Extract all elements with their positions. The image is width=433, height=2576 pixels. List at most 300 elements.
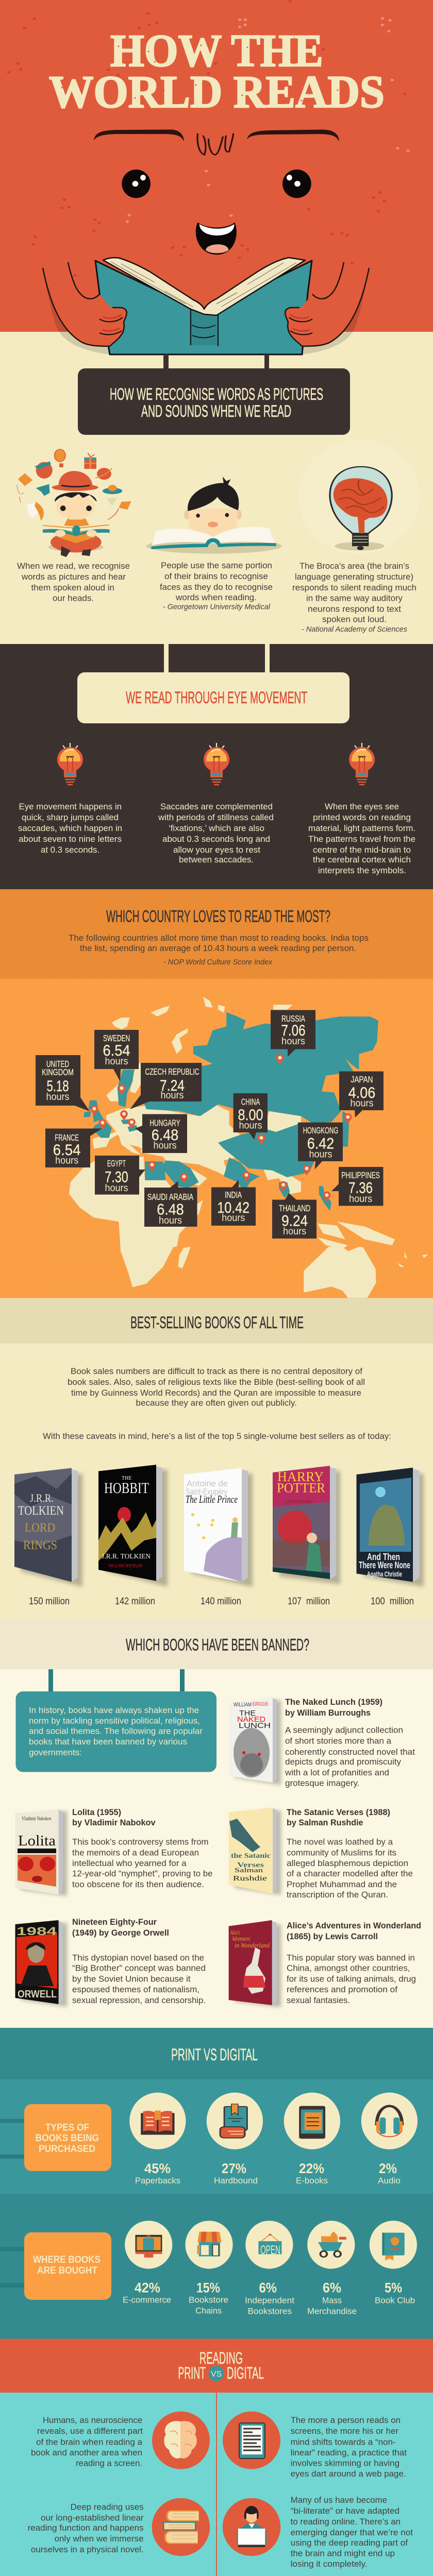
text: non-linear reading: mind shifts towards a “non- xyxy=(291,2438,396,2447)
text: the satanic verses xyxy=(287,1808,413,1900)
panel: country header background xyxy=(0,889,433,979)
text: alice's adventures in wonderland: for its use of talking animals, drug xyxy=(287,1975,416,1984)
book: the little prince xyxy=(184,1468,253,1587)
stats: types of books: 27% xyxy=(222,2161,246,2176)
stats: types of books: 2% xyxy=(379,2161,397,2176)
map: land xyxy=(69,997,428,1298)
text: broca's area xyxy=(292,562,417,634)
stats: types of books: 45% xyxy=(144,2161,171,2176)
text: alice's adventures in wonderland: (1865) by Lewis Carroll xyxy=(287,1932,378,1941)
text: deep reading: ourselves in a physical novel. xyxy=(31,2545,144,2554)
text: non-linear reading: linear” reading, a practice that xyxy=(291,2448,407,2458)
text: country intro: - NOP World Culture Score Index xyxy=(163,958,272,967)
icon: light bulb xyxy=(57,743,83,785)
text: the naked lunch: grotesque imagery. xyxy=(285,1779,360,1788)
callout: czech republic: hours xyxy=(161,1090,184,1101)
text: nineteen eighty-four: sexual repression, and censorship. xyxy=(72,1996,206,2005)
text: faces and words: People use the same portion xyxy=(161,561,272,570)
text: the satanic verses: The novel was loathed by a xyxy=(287,1838,393,1847)
book: the satanic verses: the Satanic xyxy=(231,1852,271,1860)
text: faces and words: faces as they do to recognise xyxy=(160,583,273,592)
heading: how we recognise words: AND SOUNDS WHEN WE READ xyxy=(141,402,291,420)
text: non-linear reading: The more a person reads on xyxy=(291,2416,401,2425)
stats: where bought: 15% xyxy=(196,2280,220,2296)
stats: types of books: Paperbacks xyxy=(135,2176,180,2185)
text: fixations xyxy=(158,802,274,865)
book: the little prince: Antoine de xyxy=(187,1479,228,1488)
heading: reading print vs digital: VS xyxy=(211,2370,222,2379)
text: bi-literate: “bi-literate” or have adapted xyxy=(291,2506,399,2516)
book: harry potter xyxy=(273,1466,340,1584)
icon row: where bought xyxy=(125,2221,417,2269)
book held by character xyxy=(95,258,312,354)
text: alice's adventures in wonderland: China, amongst other countries, xyxy=(287,1964,410,1973)
callout: banned books intro: and social themes. The following are popular xyxy=(29,1727,203,1736)
callout: hungary: 6.48 xyxy=(152,1127,178,1144)
text: light patterns: centre of the mid-brain to xyxy=(313,845,411,855)
callout: hungary: hours xyxy=(154,1141,176,1151)
book: lord of the rings: J.R.R. xyxy=(30,1492,54,1504)
illustration: brain in light bulb xyxy=(298,439,420,554)
book: the naked lunch: NAKED xyxy=(237,1715,265,1724)
text: light patterns: printed words on reading xyxy=(313,813,411,822)
callout: thailand xyxy=(272,1181,317,1239)
callout: czech republic: CZECH REPUBLIC xyxy=(145,1066,199,1077)
text: lolita xyxy=(72,1808,212,1889)
icon: hardbound xyxy=(207,2093,263,2149)
callout: hungary: HUNGARY xyxy=(149,1118,180,1128)
text: top 5 intro: With these caveats in mind, here’s a list of the top 5 single-volume best sellers as of today: xyxy=(43,1432,391,1441)
icon row: types of books xyxy=(129,2093,418,2149)
text: country intro: the list, spending an average of 10.43 hours a week reading per person. xyxy=(80,944,356,953)
callout: china: hours xyxy=(239,1120,262,1131)
callout: united kingdom xyxy=(36,1055,98,1116)
text: lolita: Lolita (1955) xyxy=(72,1808,121,1817)
callout: united kingdom: 5.18 xyxy=(46,1078,69,1095)
book: the hobbit: THE xyxy=(122,1476,131,1481)
panel: reading print vs digital header background xyxy=(0,2339,433,2393)
heading: reading print vs digital: READING xyxy=(199,2349,243,2367)
heading: we read through eye movement: WE READ THROUGH EYE MOVEMENT xyxy=(126,688,307,707)
icon: book stack xyxy=(152,2498,210,2556)
illustration: boy reading with imagined objects xyxy=(17,449,131,557)
label: types of books: TYPES OF xyxy=(45,2123,89,2133)
book: the naked lunch: BURROUGHS xyxy=(253,1701,268,1707)
text: nineteen eighty-four: espoused themes of nationalism, xyxy=(72,1985,199,1994)
text: non-linear reading xyxy=(291,2416,407,2479)
text: non-linear reading: screens, the more his or her xyxy=(291,2427,399,2436)
callout: czech republic xyxy=(120,1063,202,1121)
text: fixations: ‘fixations,’ which are also xyxy=(169,824,264,833)
callout: china: 8.00 xyxy=(238,1107,263,1124)
hero freckles xyxy=(9,1,408,309)
sign chains xyxy=(164,644,270,673)
text: different brain parts: reveals, use a different part xyxy=(37,2427,143,2436)
book: harry potter: POTTER xyxy=(277,1481,326,1495)
callout: united kingdom: hours xyxy=(46,1092,69,1103)
callout: saudi arabia: SAUDI ARABIA xyxy=(147,1192,193,1202)
stats: types of books xyxy=(135,2161,401,2185)
text: deep reading: our long-established linear xyxy=(41,2514,144,2523)
book pages xyxy=(103,258,305,315)
callout: egypt xyxy=(95,1156,156,1195)
callout: japan: 4.06 xyxy=(348,1084,375,1101)
callout: saudi arabia: 6.48 xyxy=(157,1201,184,1218)
book: alice's adventures in wonderland xyxy=(229,1920,281,2007)
callout: sweden: SWEDEN xyxy=(103,1033,130,1043)
callout: united kingdom: UNITED xyxy=(46,1059,69,1069)
text: the satanic verses: Prophet Muhammad and the xyxy=(287,1880,397,1889)
book: harry potter: J.K.ROWLING xyxy=(285,1499,313,1504)
title xyxy=(49,26,385,117)
text: sales figures: 150 million xyxy=(29,1596,70,1607)
text: light patterns: material, light patterns form. xyxy=(308,824,415,833)
text: lolita: by Vladimir Nabokov xyxy=(72,1818,156,1827)
callout: india: hours xyxy=(222,1213,245,1224)
divider line xyxy=(216,2393,217,2576)
panel: hero background xyxy=(0,0,433,332)
icon: paperback xyxy=(129,2093,186,2149)
callout: philippines: PHILIPPINES xyxy=(341,1170,380,1180)
callout: japan: hours xyxy=(351,1098,373,1109)
text: non-linear reading: eyes dart around a web page. xyxy=(291,2469,406,2479)
title: HOW THE xyxy=(110,26,323,76)
callout: hong kong: hours xyxy=(309,1149,332,1160)
text: saccades xyxy=(18,802,122,855)
book: lord of the rings: TOLKIEN xyxy=(18,1504,64,1518)
text: words as pictures: When we read, we recognise xyxy=(17,562,130,571)
book: lolita: Vladimir Nabokov xyxy=(22,1816,52,1822)
text: broca's area: responds to silent reading much xyxy=(292,583,417,592)
text: lolita: This book’s controversy stems from xyxy=(72,1838,208,1847)
text: different brain parts: book and another area when xyxy=(31,2448,142,2458)
text: lolita: too obscene for its then audience. xyxy=(72,1880,204,1889)
text: bi-literate: Many of us have become xyxy=(291,2496,387,2505)
text: sales figures: 142 million xyxy=(115,1596,155,1607)
book: the little prince: Saint-Exupéry xyxy=(186,1487,227,1497)
stats: where bought: Merchandise xyxy=(307,2307,357,2316)
book: and then there were none: Agatha Christie xyxy=(367,1570,402,1578)
panel: map background xyxy=(0,979,433,1298)
callout: saudi arabia xyxy=(144,1173,197,1227)
heading: how we recognise words xyxy=(78,368,350,435)
text: book sales caveat: because they are often given out publicly. xyxy=(136,1398,297,1408)
panel: best-selling background xyxy=(0,1344,433,1620)
text: nineteen eighty-four: by the Soviet Union because it xyxy=(72,1975,191,1984)
callout: hong kong: HONGKONG xyxy=(303,1125,338,1136)
callout: thailand: hours xyxy=(283,1226,306,1237)
text: broca's area: neurons respond to text xyxy=(308,605,401,614)
heading: reading print vs digital: DIGITAL xyxy=(227,2364,264,2382)
text: nineteen eighty-four xyxy=(72,1918,206,2005)
text: light patterns: the cerebral cortex which xyxy=(313,855,411,865)
callout: france: hours xyxy=(55,1156,78,1166)
icon: book club xyxy=(370,2221,417,2269)
icon: light bulb xyxy=(204,743,229,785)
text: alice's adventures in wonderland: sexual fantasies. xyxy=(287,1996,350,2005)
book: and then there were none: And Then xyxy=(367,1552,400,1562)
stats: types of books: E-books xyxy=(296,2176,328,2185)
text: saccades: about seven to nine letters xyxy=(19,835,122,844)
book: nineteen eighty-four: ORWELL xyxy=(18,1989,57,2000)
stats: where bought: 42% xyxy=(135,2280,160,2296)
text: nineteen eighty-four: “Big Brother” concept was banned xyxy=(72,1964,206,1973)
book: alice's adventures in wonderland: Alice’s xyxy=(230,1928,240,1936)
stats: where bought: Bookstore xyxy=(189,2295,228,2305)
stats: where bought: 6% xyxy=(259,2280,277,2296)
book: the hobbit xyxy=(98,1465,168,1587)
callout: saudi arabia: hours xyxy=(159,1215,182,1226)
callout: india: 10.42 xyxy=(217,1199,249,1216)
book: lord of the rings: RINGS xyxy=(23,1538,57,1552)
connector bars xyxy=(0,2119,24,2287)
text: light patterns: The patterns travel from the xyxy=(308,835,415,844)
text: the naked lunch: coherently constructed novel that xyxy=(285,1748,415,1757)
text: different brain parts xyxy=(31,2416,143,2468)
text: lolita: the memoirs of a dead European xyxy=(72,1849,199,1858)
callout: banned books intro: In history, books have always shaken up the xyxy=(29,1706,199,1715)
character left hand xyxy=(43,262,127,354)
callout: philippines: hours xyxy=(349,1194,372,1205)
label: open sign text: OPEN xyxy=(260,2243,280,2257)
text: faces and words xyxy=(160,561,273,611)
panel: neuroscience background xyxy=(0,2393,433,2576)
map: highlighted countries xyxy=(84,1012,378,1211)
icon: e-commerce xyxy=(125,2221,172,2269)
label: types of books xyxy=(24,2104,111,2171)
callout: india xyxy=(211,1172,256,1226)
panel: book types background xyxy=(0,2079,433,2194)
callout: banned books intro: governments: xyxy=(29,1748,82,1757)
book: the naked lunch: WILLIAM xyxy=(234,1702,252,1708)
text: saccades: Eye movement happens in xyxy=(19,802,122,811)
callout: banned books intro: books that have been banned by various xyxy=(29,1737,187,1747)
book: the satanic verses xyxy=(229,1807,281,1895)
text: the naked lunch: of short stories more than a xyxy=(285,1737,392,1746)
text: saccades: saccades, which happen in xyxy=(18,824,122,833)
callout: united kingdom: KINGDOM xyxy=(42,1067,74,1077)
callout: russia xyxy=(271,1010,315,1065)
text: words as pictures: words as pictures and hear xyxy=(21,572,126,582)
text: the satanic verses: by Salman Rushdie xyxy=(287,1818,363,1827)
callout: france: 6.54 xyxy=(53,1142,80,1159)
icon: woman at laptop xyxy=(223,2498,280,2556)
book: and then there were none xyxy=(357,1468,424,1587)
text: sales figures: 140 million xyxy=(201,1596,241,1607)
text: faces and words: of their brains to recognise xyxy=(164,572,268,581)
text: country intro xyxy=(69,934,369,967)
book: lord of the rings xyxy=(14,1468,82,1587)
stats: types of books: Hardbound xyxy=(214,2176,258,2185)
icon: e-book xyxy=(284,2093,340,2149)
text: different brain parts: of the brain when reading a xyxy=(36,2438,143,2447)
callout: japan xyxy=(339,1072,384,1124)
text: book sales caveat xyxy=(68,1367,365,1408)
text: sales figures: 107 million xyxy=(288,1596,330,1607)
book: the satanic verses: Salman xyxy=(235,1866,263,1874)
stats: where bought: 6% xyxy=(323,2280,341,2296)
book: the satanic verses: Verses xyxy=(237,1861,264,1869)
book: alice's adventures in wonderland: in Wonderland xyxy=(235,1941,270,1949)
stats: types of books: Audio xyxy=(378,2176,401,2185)
character face xyxy=(94,129,339,255)
text: the satanic verses: community of Muslims for its xyxy=(287,1849,396,1858)
book spine xyxy=(190,309,218,346)
stats: where bought: Book Club xyxy=(375,2296,415,2306)
text: bi-literate: losing it completely. xyxy=(291,2560,367,2569)
text: deep reading: Deep reading uses xyxy=(71,2503,144,2512)
text: words as pictures: them spoken aloud in xyxy=(31,583,114,592)
mouth xyxy=(196,223,237,255)
text: alice's adventures in wonderland xyxy=(287,1921,421,2005)
text: nineteen eighty-four: This dystopian novel based on the xyxy=(72,1954,204,1963)
text: different brain parts: Humans, as neuroscience xyxy=(43,2416,142,2425)
text: the naked lunch: A seemingly adjunct collection xyxy=(285,1726,403,1735)
panel: eye movement background xyxy=(0,644,433,889)
text: the satanic verses: of a character modelled after the xyxy=(287,1869,413,1878)
sign chains xyxy=(163,354,269,368)
text: words as pictures: our heads. xyxy=(53,594,94,603)
panel: banned header background xyxy=(0,1620,433,1669)
text: fixations: allow your eyes to rest xyxy=(173,845,260,855)
icon: cart xyxy=(307,2221,355,2269)
icon: audio xyxy=(361,2093,418,2149)
eyebrows xyxy=(94,129,339,142)
icon: bookstore xyxy=(185,2221,233,2269)
panel: print vs digital header background xyxy=(0,2028,433,2079)
text: the naked lunch: The Naked Lunch (1959) xyxy=(285,1698,382,1707)
callout: egypt: 7.30 xyxy=(105,1168,128,1186)
text: broca's area: language generating structure) xyxy=(295,572,413,582)
eyes xyxy=(122,170,311,198)
text: bi-literate xyxy=(291,2496,413,2569)
text: deep reading: only when we immerse xyxy=(55,2534,144,2544)
text: fixations: about 0.3 seconds long and xyxy=(162,835,270,844)
callout: egypt: EGYPT xyxy=(107,1158,126,1168)
book: the hobbit: THE CLASSIC BESTSELLER xyxy=(108,1564,142,1568)
label: where books are bought: WHERE BOOKS xyxy=(33,2255,101,2265)
character right hand xyxy=(285,262,369,354)
callout: philippines xyxy=(323,1167,384,1206)
stats: types of books: 22% xyxy=(299,2161,324,2176)
label: types of books: PURCHASED xyxy=(39,2144,95,2155)
callout: china: CHINA xyxy=(241,1096,260,1107)
book: the hobbit: HOBBIT xyxy=(104,1480,149,1497)
text: lolita: 12-year-old “nymphet”, proving to be xyxy=(72,1869,212,1878)
text: fixations: Saccades are complemented xyxy=(160,802,273,811)
callout: hong kong: 6.42 xyxy=(307,1136,334,1152)
text: light patterns xyxy=(308,802,415,875)
book: nineteen eighty-four: 1984 xyxy=(16,1925,57,1938)
book: the naked lunch: THE xyxy=(239,1709,256,1718)
text: lolita: intellectual who yearned for a xyxy=(72,1859,187,1868)
text: broca's area: - National Academy of Sciences xyxy=(302,625,407,634)
text: sales figures xyxy=(29,1596,414,1607)
text: book sales caveat: time by Guinness World Records) and the Quran are impossible to measure xyxy=(71,1388,361,1398)
heading: best-selling books of all time: BEST-SELLING BOOKS OF ALL TIME xyxy=(130,1313,304,1332)
book: harry potter: HARRY xyxy=(277,1469,324,1484)
title: WORLD READS xyxy=(49,67,385,117)
text: nineteen eighty-four: (1949) by George Orwell xyxy=(72,1928,169,1938)
book: and then there were none: There Were None xyxy=(359,1560,410,1570)
icon: e-reader xyxy=(223,2412,280,2469)
text: broca's area: in the same way auditory xyxy=(306,594,403,603)
text: country intro: The following countries allot more time than most to reading books. India tops xyxy=(69,934,369,943)
panel: cream intro background xyxy=(0,332,433,644)
heading: reading print vs digital xyxy=(178,2349,264,2382)
hair tuft xyxy=(197,133,234,155)
book: the naked lunch: LUNCH xyxy=(239,1721,271,1730)
callout: sweden: 6.54 xyxy=(103,1042,130,1059)
callout: india: INDIA xyxy=(225,1190,242,1200)
world map xyxy=(69,997,428,1298)
callout: sweden xyxy=(94,1030,139,1095)
text: non-linear reading: involves skimming or having xyxy=(291,2459,399,2468)
text: saccades: quick, sharp jumps called xyxy=(22,813,119,822)
text: words as pictures xyxy=(17,562,130,603)
label: where books are bought: ARE BOUGHT xyxy=(37,2265,97,2276)
text: nineteen eighty-four: Nineteen Eighty-Four xyxy=(72,1918,157,1927)
stats: where bought: Mass xyxy=(322,2296,342,2306)
heading: we read through eye movement xyxy=(77,672,349,723)
text: alice's adventures in wonderland: Alice’s Adventures in Wonderland xyxy=(287,1921,421,1930)
callout: philippines: 7.36 xyxy=(348,1180,373,1197)
book: the naked lunch xyxy=(229,1697,281,1785)
text: different brain parts: reading a screen. xyxy=(76,2459,142,2468)
heading: which books have been banned: WHICH BOOKS HAVE BEEN BANNED? xyxy=(126,1636,309,1654)
stats: where bought: E-commerce xyxy=(123,2295,171,2305)
text: bi-literate: to reading online. There’s an xyxy=(291,2517,401,2527)
callout: russia: 7.06 xyxy=(281,1022,305,1039)
callout: egypt: hours xyxy=(105,1183,128,1194)
text: broca's area: The Broca’s area (the brain’s xyxy=(299,562,409,571)
icon: brain xyxy=(152,2412,210,2469)
text: the satanic verses: transcription of the Quran. xyxy=(287,1890,388,1900)
stats: where bought xyxy=(123,2280,415,2316)
stats: where bought: Chains xyxy=(195,2306,222,2316)
text: the naked lunch: depicts drugs and promiscuity xyxy=(285,1757,402,1767)
callout: banned books intro xyxy=(15,1691,216,1772)
text: book sales caveat: Book sales numbers are difficult to track as there is no central depository of xyxy=(71,1367,362,1376)
text: sales figures: 100 million xyxy=(371,1596,414,1607)
callout: russia: hours xyxy=(281,1036,305,1047)
text: the naked lunch xyxy=(285,1698,415,1788)
text: fixations: between saccades. xyxy=(179,855,254,865)
callout: france xyxy=(45,1119,106,1167)
panel: best-selling header background xyxy=(0,1298,433,1344)
panel: banned background xyxy=(0,1669,433,2028)
text: alice's adventures in wonderland: This popular story was banned in xyxy=(287,1954,415,1963)
text: faces and words: words when reading. xyxy=(175,593,257,602)
callout: russia: RUSSIA xyxy=(281,1013,305,1024)
callout: sweden: hours xyxy=(105,1056,128,1067)
text: fixations: with periods of stillness called xyxy=(158,813,274,822)
callout: hong kong xyxy=(298,1123,343,1176)
icon: open sign xyxy=(245,2221,293,2269)
stats: where bought: Bookstores xyxy=(247,2307,292,2316)
book: nineteen eighty-four xyxy=(15,1920,67,2007)
callout: france: FRANCE xyxy=(55,1132,79,1143)
callout: czech republic: 7.24 xyxy=(160,1077,185,1094)
text: book sales caveat: book sales. Also, sales of religious texts like the Bible (best-selling book of all xyxy=(68,1378,365,1387)
text: saccades: at 0.3 seconds. xyxy=(41,845,99,855)
book: the satanic verses: Rushdie xyxy=(233,1875,267,1883)
heading: reading print vs digital: PRINT xyxy=(178,2364,206,2382)
illustration: child behind open book xyxy=(146,477,281,554)
sign chains xyxy=(48,1669,185,1692)
label: where books are bought xyxy=(24,2232,111,2300)
text: light patterns: interprets the symbols. xyxy=(318,866,406,875)
